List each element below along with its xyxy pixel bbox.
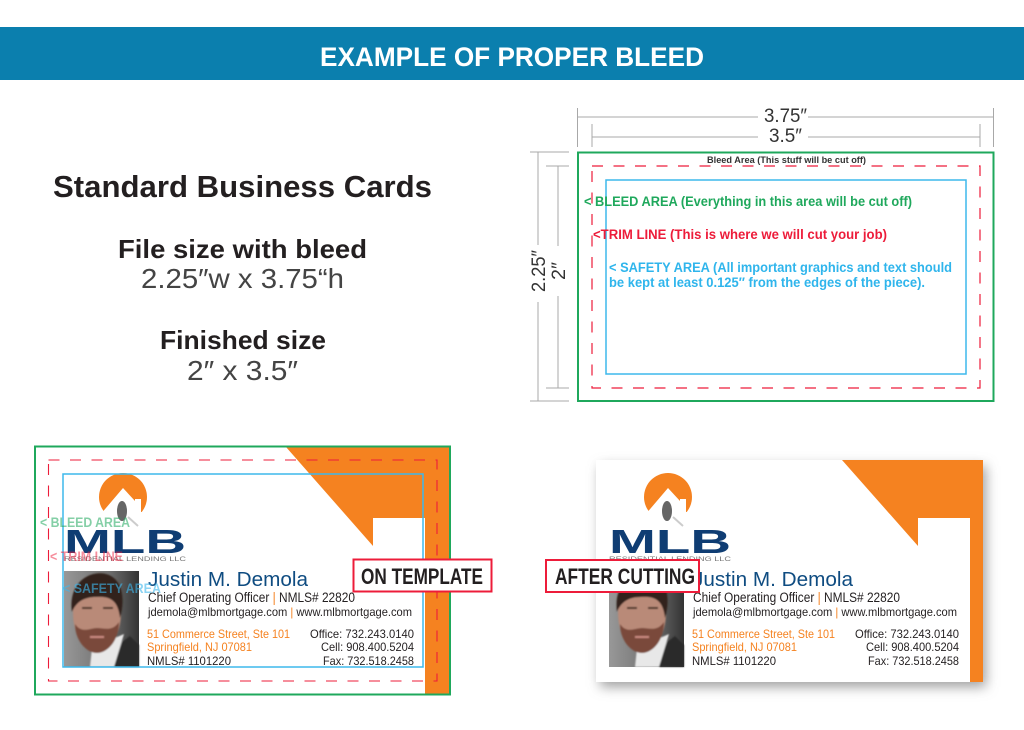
contact details: Springfield, NJ 07081 [147, 640, 252, 654]
portrait photo [609, 571, 684, 667]
contact details: NMLS# 1101220 [692, 654, 776, 668]
card face [596, 460, 983, 682]
card shadow [600, 466, 986, 687]
bleed outline [578, 152, 994, 401]
faint bleed area label: < BLEED AREA [40, 515, 130, 530]
finished size label: Finished size [160, 325, 326, 355]
contact details: Cell: 908.400.5204 [321, 640, 414, 654]
file size label: File size with bleed [118, 234, 367, 264]
contact details [692, 568, 959, 668]
dimension: 2.25 inch: 2.25″ [529, 250, 550, 292]
card orange shape [286, 447, 450, 694]
logo [64, 473, 187, 563]
bleed area label: < BLEED AREA (Everything in this area will be cut off) [584, 194, 912, 209]
contact details: 51 Commerce Street, Ste 101 [147, 627, 290, 641]
logo: RESIDENTIAL LENDING LLC [64, 557, 187, 563]
contact details: Cell: 908.400.5204 [866, 640, 959, 654]
after cutting tag: AFTER CUTTING [555, 564, 695, 589]
panel: bleed template diagram [529, 106, 994, 401]
header banner [0, 27, 1024, 80]
contact details: jdemola@mlbmortgage.com | www.mlbmortgage.com [692, 605, 957, 619]
on template tag: ON TEMPLATE [361, 564, 483, 589]
after cutting tag [546, 560, 699, 592]
on template tag [354, 560, 492, 592]
dimension: 3.75 inch: 3.75″ [764, 106, 807, 127]
safety area label: < SAFETY AREA (All important graphics and text should [609, 260, 952, 275]
panel: size specifications [53, 169, 432, 386]
contact details: NMLS# 1101220 [147, 654, 231, 668]
portrait photo [64, 571, 139, 667]
title: EXAMPLE OF PROPER BLEED [320, 42, 704, 72]
trim line [592, 166, 980, 388]
contact details [147, 568, 414, 668]
contact details: Fax: 732.518.2458 [868, 654, 959, 668]
safety area label [609, 260, 952, 290]
contact details: Justin M. Demola [148, 568, 309, 591]
panel: card on template [35, 446, 492, 694]
contact details: Office: 732.243.0140 [310, 627, 414, 641]
contact details: jdemola@mlbmortgage.com | www.mlbmortgage.com [147, 605, 412, 619]
safety outline [606, 180, 966, 374]
dimension: 2 inch: 2″ [549, 262, 570, 280]
contact details: Office: 732.243.0140 [855, 627, 959, 641]
file size value: 2.25″w x 3.75“h [141, 263, 344, 294]
faint safety area label: < SAFETY AREA [63, 581, 161, 596]
faint trim line label: < TRIM LINE [50, 549, 123, 564]
heading: standard business cards: Standard Business Cards [53, 169, 432, 204]
contact details: Fax: 732.518.2458 [323, 654, 414, 668]
trim line label: <TRIM LINE (This is where we will cut your job) [593, 227, 887, 242]
logo: MLB [609, 523, 731, 560]
contact details: Justin M. Demola [693, 568, 854, 591]
contact details: 51 Commerce Street, Ste 101 [692, 627, 835, 641]
contact details: Chief Operating Officer | NMLS# 22820 [148, 590, 355, 605]
bleed area note: Bleed Area (This stuff will be cut off) [707, 155, 866, 165]
contact details: Springfield, NJ 07081 [692, 640, 797, 654]
logo: MLB [64, 523, 186, 560]
template trim line [48, 460, 437, 681]
dimension lines [530, 108, 994, 401]
template bleed outline [35, 446, 450, 694]
finished size value: 2″ x 3.5″ [187, 355, 298, 386]
card orange shape [842, 460, 983, 682]
template safety outline [63, 474, 423, 667]
safety area label: be kept at least 0.125″ from the edges of the piece). [609, 275, 925, 290]
logo: RESIDENTIAL LENDING LLC [609, 557, 732, 563]
panel: card after cutting [546, 460, 986, 687]
logo [609, 473, 732, 563]
dimension: 3.5 inch: 3.5″ [769, 126, 802, 147]
contact details: Chief Operating Officer | NMLS# 22820 [693, 590, 900, 605]
